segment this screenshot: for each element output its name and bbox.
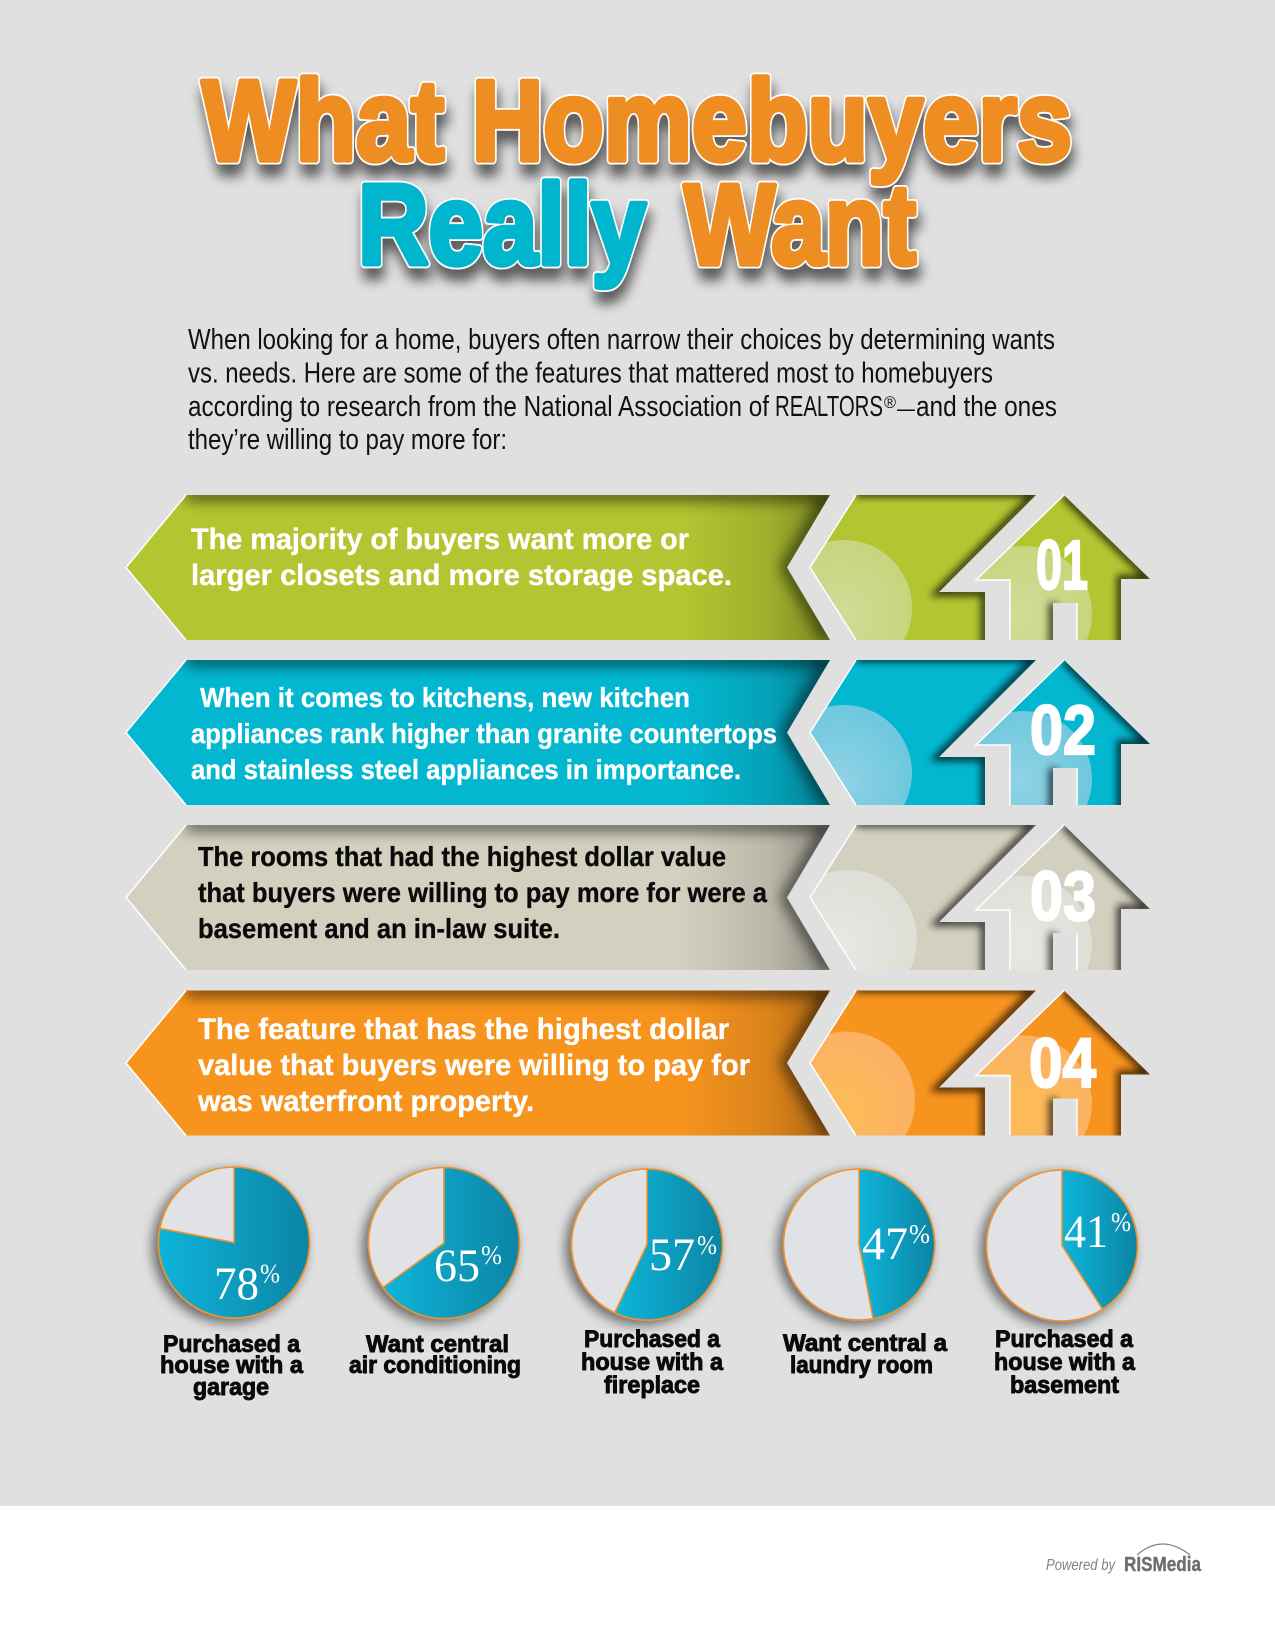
value 57 [649, 1229, 717, 1281]
text 01 [191, 523, 732, 592]
pie 57 [572, 1169, 722, 1320]
intro text: and the ones [916, 391, 1057, 423]
text 03 [198, 841, 768, 944]
footer logo: RISMedia [1124, 1554, 1202, 1576]
intro text: REALTORS [775, 391, 883, 423]
banner and house 03 [125, 824, 1150, 970]
number 04: 04 [1029, 1024, 1096, 1102]
label 65: Want central [366, 1331, 509, 1358]
pie 78 [158, 1167, 310, 1318]
label 78: Purchased a [163, 1331, 301, 1358]
title: What Homebuyers [202, 58, 1072, 185]
edge highlights 02 [126, 660, 1077, 805]
intro text: — [897, 396, 915, 421]
number 02: 02 [1030, 691, 1096, 769]
intro text: they’re willing to pay more for: [188, 424, 507, 456]
value 41: 41 [1064, 1206, 1108, 1258]
arrow banner 03 [126, 825, 830, 970]
title [202, 58, 1072, 289]
intro text: When looking for a home, buyers often narrow their choices by determining wants [188, 324, 1055, 356]
banner and house 02 [125, 660, 1150, 806]
label 41: Purchased a [995, 1326, 1134, 1353]
label 57: house with a [581, 1349, 724, 1376]
value 65: 65 [434, 1240, 480, 1292]
label 41: house with a [994, 1349, 1136, 1376]
text 01: The majority of buyers want more or [191, 523, 689, 556]
label 47: Want central a [783, 1330, 948, 1357]
chart: 65% central air [349, 1168, 521, 1379]
label 57: Purchased a [584, 1326, 721, 1353]
title: Really [358, 162, 646, 289]
title: Want [684, 162, 916, 289]
banner and house 04 [125, 990, 1150, 1136]
value 65 [434, 1240, 502, 1292]
text 03: The rooms that had the highest dollar value [198, 841, 726, 872]
arrow banner 04 [126, 990, 830, 1136]
text 02: appliances rank higher than granite countertops [191, 718, 777, 749]
text 01: larger closets and more storage space. [191, 559, 732, 592]
middle piece 04 [811, 990, 1036, 1136]
value 47: 47 [862, 1218, 908, 1270]
chart: 57% fireplace [572, 1169, 724, 1399]
pie 47 [784, 1169, 935, 1320]
edge highlights 03 [126, 825, 1077, 970]
text 02: and stainless steel appliances in importance. [191, 754, 741, 785]
icon: house 03 [1001, 825, 1150, 970]
footer logo [1046, 1544, 1202, 1576]
panel: feature 01 [125, 494, 1150, 640]
label 57 [581, 1326, 724, 1399]
text 03: basement and an in-law suite. [198, 913, 560, 944]
arrow banner 01 [126, 495, 830, 640]
intro text: according to research from the National Association of [188, 391, 769, 423]
label 65: air conditioning [349, 1352, 521, 1379]
text 02 [191, 682, 777, 785]
value 41: % [1111, 1207, 1131, 1237]
label 57: fireplace [604, 1372, 700, 1399]
label 41: basement [1010, 1372, 1119, 1399]
text 04: was waterfront property. [197, 1085, 534, 1118]
text 04: value that buyers were willing to pay for [198, 1049, 750, 1082]
label 78: house with a [160, 1352, 304, 1379]
label 47 [783, 1330, 948, 1379]
title: Want [684, 162, 916, 289]
label 78 [160, 1331, 304, 1401]
title: Really [358, 162, 646, 289]
intro text [188, 324, 1057, 456]
label 41 [994, 1326, 1136, 1399]
icon: house 04 [978, 990, 1150, 1136]
value 47: % [909, 1219, 930, 1249]
chart: 41% basement [986, 1170, 1138, 1399]
value 47 [862, 1218, 930, 1270]
middle piece 03 [817, 825, 1036, 970]
chart: 47% laundry room [783, 1169, 948, 1379]
label 65 [349, 1331, 521, 1379]
label 78: garage [193, 1374, 269, 1401]
title: What Homebuyers [202, 58, 1072, 185]
number 03: 03 [1030, 857, 1096, 935]
value 78: % [260, 1258, 280, 1288]
chart: 78% garage [158, 1167, 310, 1401]
text 02: When it comes to kitchens, new kitchen [200, 682, 690, 713]
intro text: ® [884, 393, 896, 412]
label 47: laundry room [790, 1352, 933, 1379]
panel: feature 03 [125, 824, 1150, 970]
footer logo: Powered by [1046, 1557, 1116, 1574]
text 03: that buyers were willing to pay more for were a [198, 877, 768, 908]
value 57: 57 [649, 1229, 695, 1281]
text 04: The feature that has the highest dollar [198, 1013, 729, 1046]
arrow banner 02 [126, 660, 830, 805]
middle piece 01 [811, 495, 1036, 640]
edge highlights 04 [126, 990, 1077, 1136]
intro text: vs. needs. Here are some of the features that mattered most to homebuyers [188, 358, 993, 390]
panel: feature 04 [125, 990, 1150, 1136]
text 04 [197, 1013, 750, 1118]
value 57: % [697, 1230, 717, 1260]
pie 41 [986, 1170, 1138, 1321]
number 01: 01 [1036, 526, 1088, 604]
pie 65 [368, 1168, 520, 1318]
value 78: 78 [214, 1258, 259, 1310]
icon: house 01 [978, 495, 1150, 640]
value 65: % [481, 1240, 502, 1270]
middle piece 02 [810, 660, 1036, 805]
panel: feature 02 [125, 660, 1150, 806]
edge highlights 01 [126, 495, 1077, 640]
icon: house 02 [978, 660, 1150, 805]
